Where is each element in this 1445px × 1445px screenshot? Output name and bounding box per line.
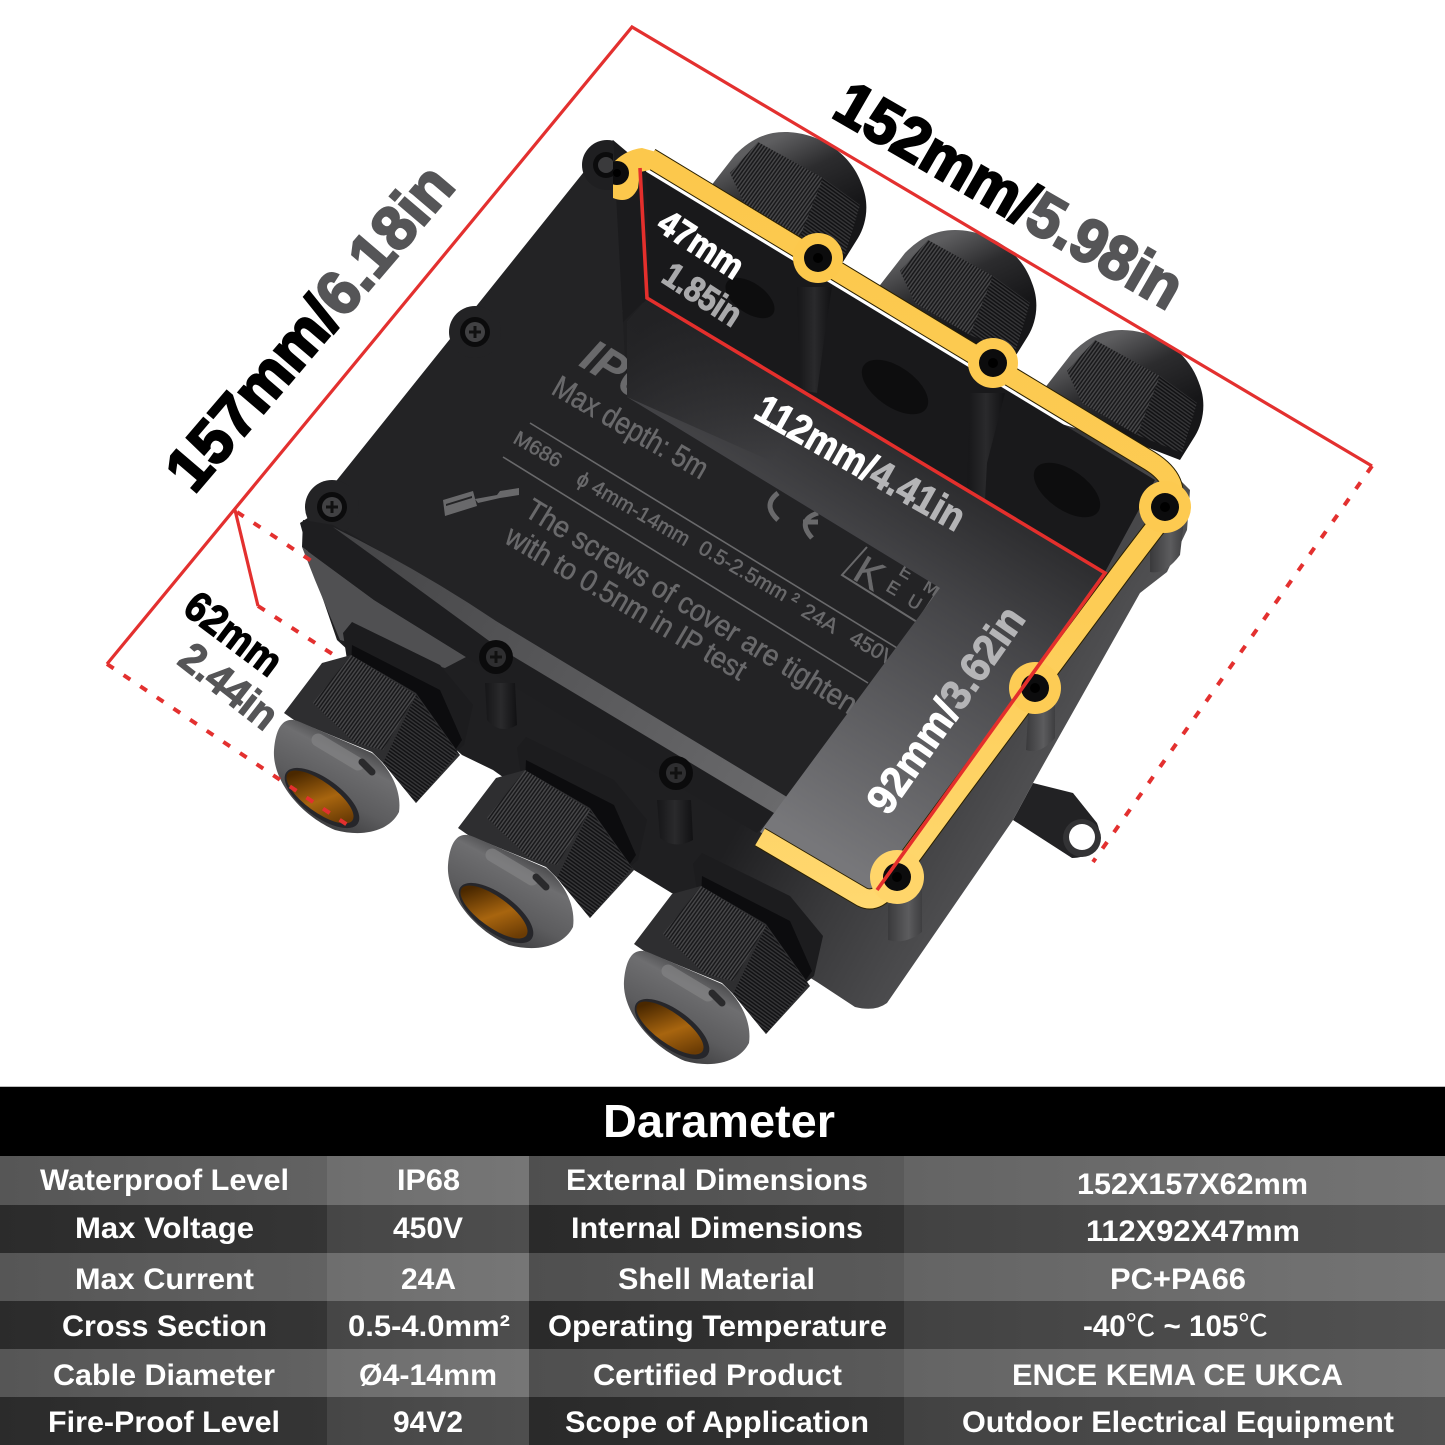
row: waterproof level / external dimensions: IP68 bbox=[397, 1164, 460, 1197]
icon: screwdriver bbox=[443, 488, 519, 516]
yellow sealing rim bbox=[613, 148, 1191, 904]
model number: M686 bbox=[510, 427, 566, 472]
cable gland: rear right bbox=[1037, 330, 1203, 460]
KEMA mark: M bbox=[920, 575, 943, 600]
lid printed markings bbox=[443, 329, 943, 721]
row: cross section / operating temperature: 0.5-4.0mm² bbox=[348, 1310, 510, 1343]
row: fire-proof level / scope of application: Scope of Application bbox=[565, 1406, 869, 1439]
cable gland: rear middle bbox=[870, 230, 1036, 360]
dimension label: width: 152mm/5.98in bbox=[823, 68, 1195, 323]
row: max current / shell material: PC+PA66 bbox=[1110, 1263, 1246, 1296]
IP rating mark: IP68 bbox=[573, 329, 681, 423]
parameter table bbox=[0, 1086, 1445, 1445]
row backgrounds bbox=[0, 1156, 1445, 1445]
current rating: 24A bbox=[798, 599, 842, 638]
screw notice line 1: The screws of cover are tighten bbox=[519, 493, 863, 721]
row: max current / shell material bbox=[75, 1263, 1246, 1296]
depth text: Max depth: 5m bbox=[546, 369, 715, 486]
row: waterproof level / external dimensions: External Dimensions bbox=[566, 1164, 868, 1197]
screw stand-offs bbox=[485, 683, 693, 845]
lid bevel highlight bbox=[333, 527, 787, 813]
KEMA mark: E bbox=[883, 576, 904, 600]
table title: Darameter bbox=[603, 1095, 835, 1147]
row: cross section / operating temperature: Cross Section bbox=[62, 1310, 267, 1343]
dimension label: internal depth mm: 47mm bbox=[651, 201, 752, 287]
table title bar bbox=[0, 1087, 1445, 1156]
row: max voltage / internal dimensions: 450V bbox=[393, 1212, 463, 1245]
spec lines bbox=[503, 423, 897, 683]
row: cross section / operating temperature bbox=[62, 1310, 1268, 1343]
row: cable diameter / certified product: Cable Diameter bbox=[53, 1359, 275, 1392]
row: max current / shell material: Shell Material bbox=[618, 1263, 815, 1296]
row: cable diameter / certified product: Ø4-14mm bbox=[359, 1359, 497, 1392]
row: max voltage / internal dimensions bbox=[75, 1212, 1300, 1248]
row: waterproof level / external dimensions bbox=[40, 1164, 1308, 1201]
lid screws bbox=[317, 152, 693, 790]
front cable gland: right bbox=[624, 853, 823, 1070]
row: max voltage / internal dimensions: Max Voltage bbox=[75, 1212, 254, 1245]
row: cable diameter / certified product bbox=[53, 1359, 1343, 1392]
row: max voltage / internal dimensions: Internal Dimensions bbox=[571, 1212, 863, 1245]
wire cross-section: 0.5-2.5mm ² bbox=[694, 536, 803, 612]
row: cross section / operating temperature: Operating Temperature bbox=[548, 1310, 887, 1343]
lid surface bbox=[305, 140, 935, 620]
dimension label: internal depth inches: 1.85in bbox=[656, 255, 749, 335]
row: cable diameter / certified product: Certified Product bbox=[593, 1359, 842, 1392]
rim screw holes bbox=[605, 161, 1179, 891]
row: fire-proof level / scope of application bbox=[48, 1406, 1394, 1439]
KEMA mark bbox=[842, 547, 943, 622]
KEMA mark: E bbox=[896, 560, 917, 584]
table top hairline bbox=[0, 1086, 1445, 1087]
mounting tab bbox=[1013, 783, 1101, 858]
interior wall bbox=[613, 140, 1155, 572]
KEMA mark: U bbox=[904, 590, 925, 614]
front cable gland: middle bbox=[448, 737, 647, 954]
cable gland: rear left bbox=[700, 132, 866, 262]
interior dimension lines bbox=[640, 168, 1105, 890]
dimension label: length: 157mm/6.18in bbox=[152, 151, 468, 504]
dimension label: internal length: 92mm/3.62in bbox=[857, 597, 1034, 822]
dimension label: internal width: 112mm/4.41in bbox=[748, 387, 973, 540]
row: fire-proof level / scope of application: Fire-Proof Level bbox=[48, 1406, 280, 1439]
row: max voltage / internal dimensions: 112X92X47mm bbox=[1086, 1215, 1300, 1248]
CE mark bbox=[770, 493, 818, 538]
row: cable diameter / certified product: ENCE KEMA CE UKCA bbox=[1012, 1359, 1343, 1392]
row: waterproof level / external dimensions: Waterproof Level bbox=[40, 1164, 289, 1197]
dimension label: height inches: 2.44in bbox=[170, 633, 288, 739]
dimension label: height mm: 62mm bbox=[176, 582, 292, 685]
dimension lines: outer bbox=[107, 27, 1372, 862]
row: max current / shell material: 24A bbox=[401, 1263, 456, 1296]
KEMA mark: K bbox=[846, 548, 892, 600]
screw notice line 2: with to 0.5nm in IP test bbox=[499, 519, 753, 687]
row: fire-proof level / scope of application: 94V2 bbox=[393, 1406, 463, 1439]
voltage rating: 450V bbox=[846, 626, 900, 671]
row: fire-proof level / scope of application: Outdoor Electrical Equipment bbox=[962, 1406, 1394, 1439]
cut-away interior floor bbox=[627, 298, 1105, 900]
lid front lip bbox=[302, 520, 787, 833]
row: waterproof level / external dimensions: 152X157X62mm bbox=[1077, 1168, 1308, 1201]
row: max current / shell material: Max Current bbox=[75, 1263, 254, 1296]
row: cross section / operating temperature: -40℃ ~ 105℃ bbox=[1083, 1310, 1268, 1343]
junction box body bbox=[300, 300, 1190, 1009]
cable range: ϕ 4mm-14mm bbox=[572, 467, 694, 551]
front cable gland: left bbox=[274, 622, 473, 839]
